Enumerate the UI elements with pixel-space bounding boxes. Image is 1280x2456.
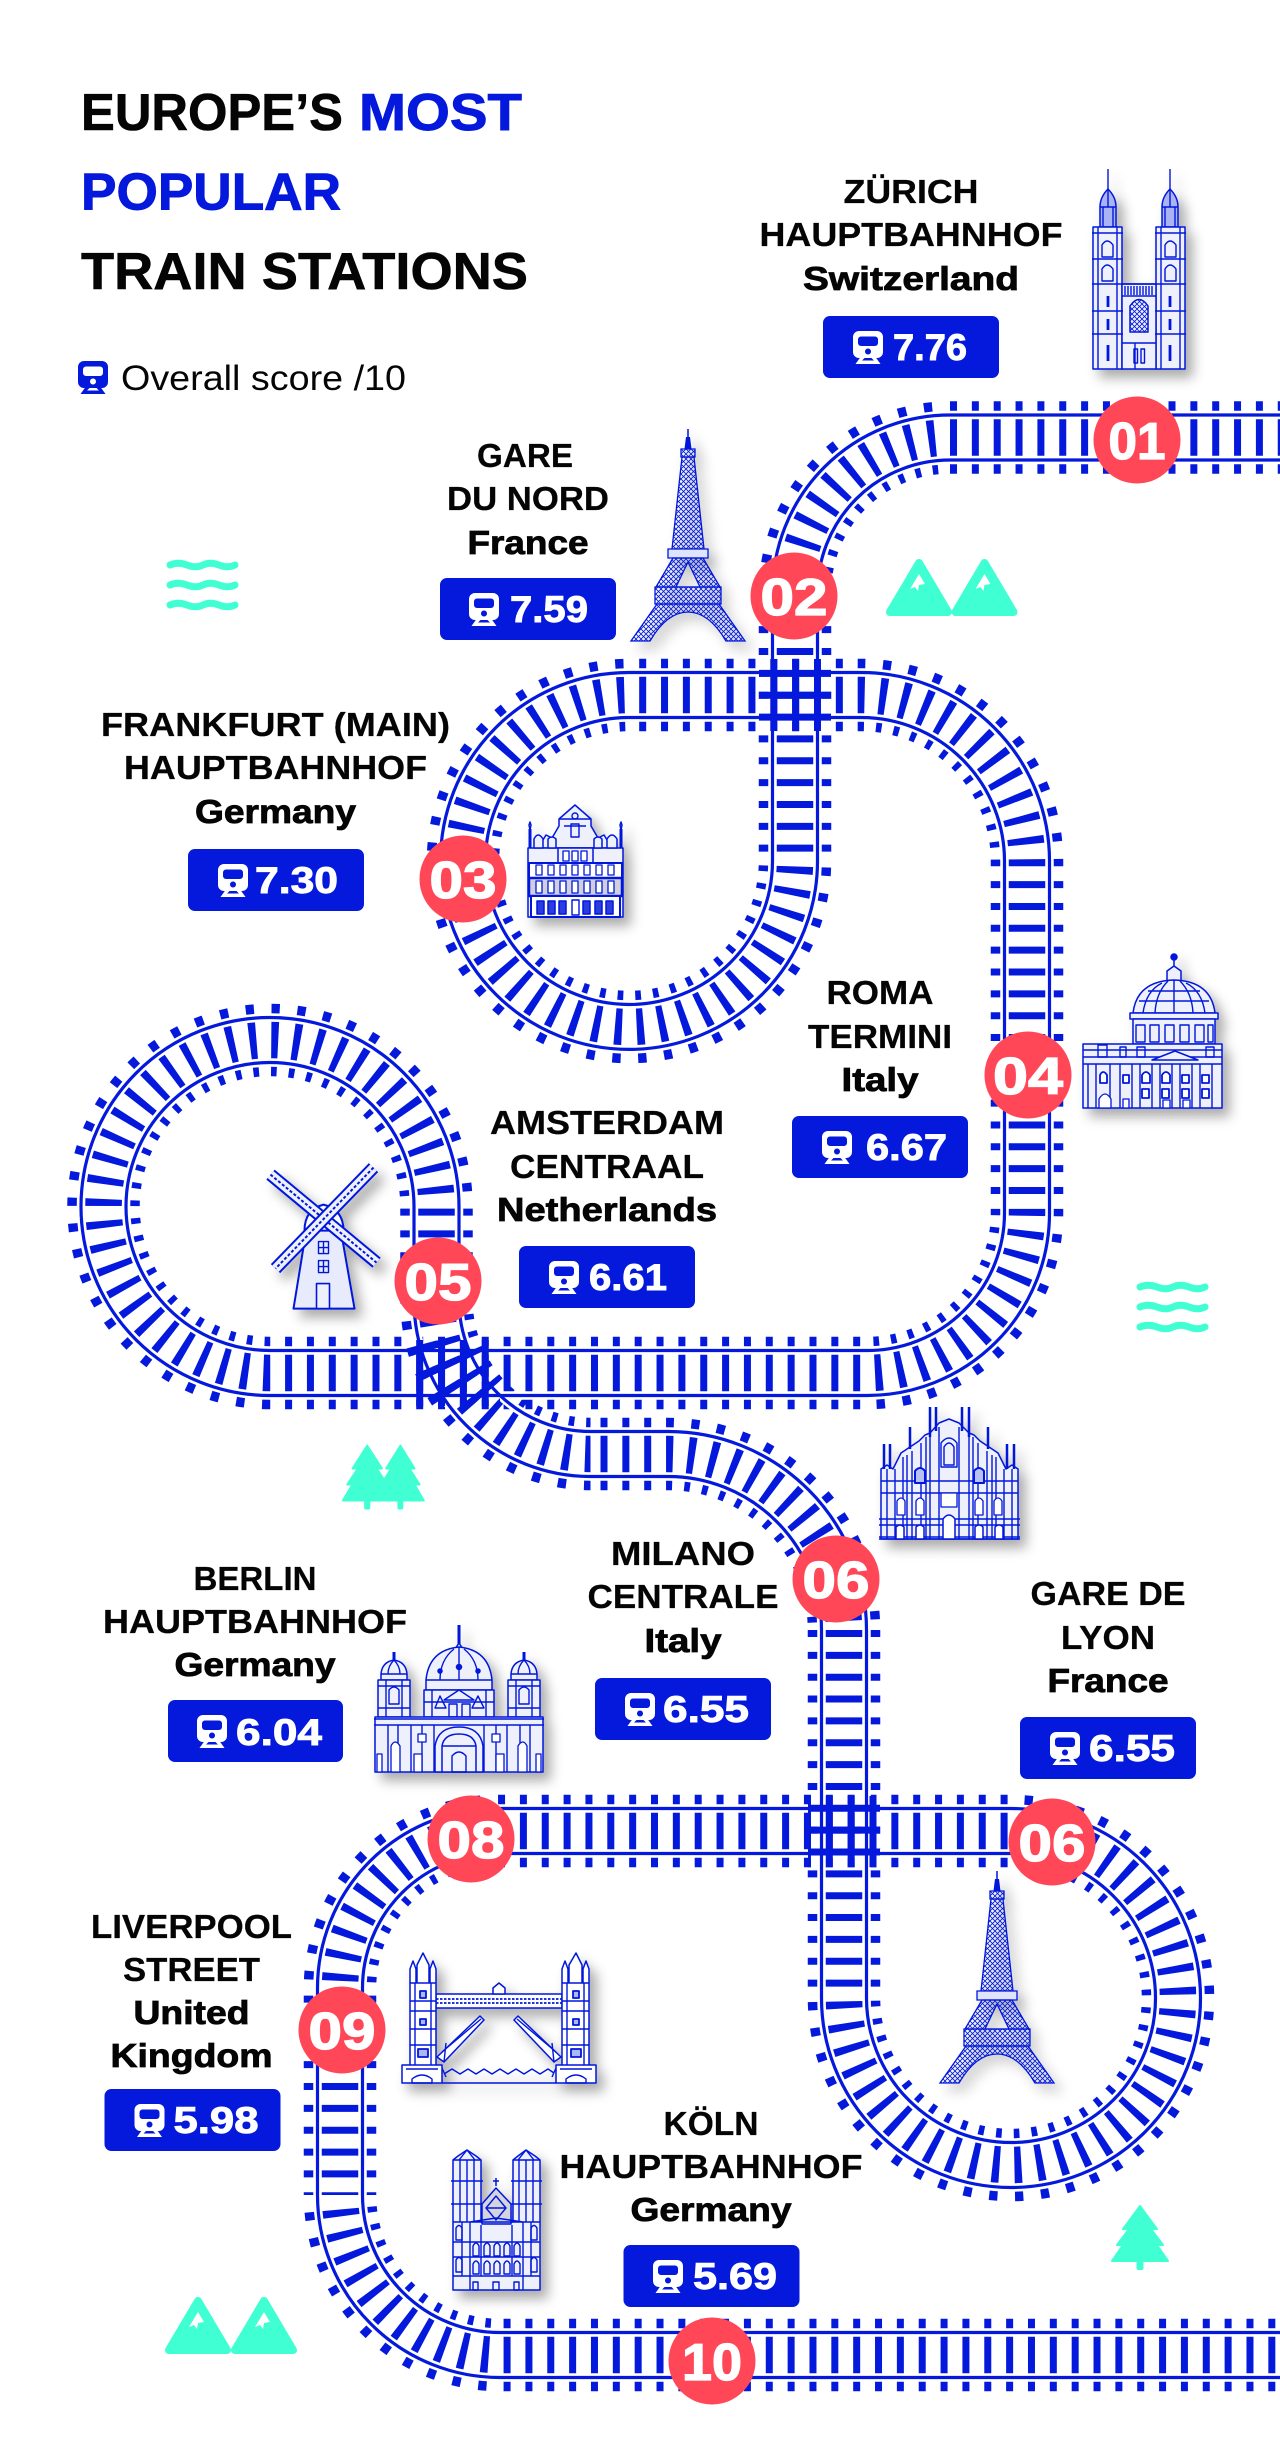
station label: Amsterdam Centraal: AMSTERDAM bbox=[490, 1104, 724, 1141]
landmark: Cologne Cathedral bbox=[451, 2150, 542, 2290]
station label: Gare du Nord: GARE bbox=[477, 437, 573, 474]
rank badge 05 bbox=[394, 1238, 482, 1324]
rank badge 01: 01 bbox=[1108, 413, 1166, 471]
station label: Roma Termini: ROMA bbox=[826, 974, 934, 1011]
station label: Berlin HB: Germany bbox=[174, 1646, 336, 1683]
station label: Gare du Nord: France bbox=[468, 524, 588, 561]
score pill bbox=[624, 2245, 800, 2307]
station label: Köln HB: Germany bbox=[630, 2191, 792, 2228]
title: EUROPE’S bbox=[81, 84, 343, 142]
score pill: 6.55 bbox=[663, 1689, 749, 1730]
landmark: Berlin Cathedral bbox=[374, 1625, 544, 1772]
decoration: mountains bbox=[169, 2301, 293, 2350]
rank badge 08: 08 bbox=[438, 1812, 504, 1870]
station label: Liverpool Street: United bbox=[134, 1994, 250, 2031]
rank badge 06 Milano: 06 bbox=[802, 1552, 870, 1610]
station label: Köln HB: KÖLN bbox=[664, 2105, 758, 2142]
landmark: Römer Frankfurt bbox=[528, 805, 623, 917]
title bbox=[81, 84, 528, 301]
rank badge 04 bbox=[984, 1032, 1072, 1118]
station label: Zürich HB bbox=[760, 173, 1062, 378]
title: TRAIN STATIONS bbox=[81, 243, 528, 301]
station label: Köln HB: HAUPTBAHNHOF bbox=[560, 2148, 862, 2185]
landmark: Eiffel Tower bbox=[631, 429, 745, 641]
station label: Frankfurt bbox=[101, 706, 450, 911]
score pill bbox=[595, 1678, 771, 1740]
station label: Frankfurt: HAUPTBAHNHOF bbox=[124, 749, 427, 786]
rank badge 06 Lyon bbox=[1008, 1798, 1096, 1886]
rank badge 03: 03 bbox=[430, 852, 496, 910]
station label: Liverpool Street bbox=[91, 1908, 292, 2151]
score pill bbox=[188, 849, 364, 911]
station label: Berlin HB bbox=[103, 1560, 407, 1762]
station label: Gare de Lyon: France bbox=[1048, 1662, 1168, 1699]
rank badge 05: 05 bbox=[404, 1254, 472, 1312]
score pill: 5.98 bbox=[174, 2100, 258, 2141]
score pill bbox=[104, 2089, 280, 2151]
station label: Amsterdam Centraal: CENTRAAL bbox=[510, 1148, 704, 1185]
score pill bbox=[792, 1116, 968, 1178]
rank badge 02 bbox=[750, 552, 838, 640]
score pill bbox=[168, 1700, 343, 1762]
rank badge 06 Lyon: 06 bbox=[1018, 1815, 1086, 1873]
decoration: trees bbox=[343, 1446, 424, 1510]
rank badge 06 Milano bbox=[792, 1536, 880, 1622]
station label: Gare de Lyon bbox=[1020, 1575, 1196, 1779]
rank badge 02: 02 bbox=[760, 569, 828, 627]
station label: Gare de Lyon: LYON bbox=[1061, 1619, 1155, 1656]
rank badge 08 bbox=[428, 1796, 514, 1882]
station label: Milano Centrale: MILANO bbox=[611, 1535, 755, 1572]
score pill: 6.04 bbox=[236, 1712, 323, 1753]
score pill bbox=[1020, 1717, 1196, 1779]
rank badge 09: 09 bbox=[308, 2003, 376, 2061]
title: POPULAR bbox=[81, 164, 341, 222]
station label: Köln HB bbox=[560, 2105, 862, 2307]
rank badge 10: 10 bbox=[682, 2334, 742, 2392]
rank badge 01 bbox=[1094, 396, 1180, 484]
station label: Frankfurt: Germany bbox=[195, 793, 357, 830]
landmark: Grossmünster bbox=[1092, 169, 1186, 369]
score pill: 7.30 bbox=[255, 860, 338, 901]
station label: Milano Centrale bbox=[588, 1535, 778, 1740]
score pill: 7.59 bbox=[510, 589, 588, 630]
legend: overall score: Overall score /10 bbox=[121, 359, 406, 398]
landmark: Eiffel Tower bbox=[940, 1871, 1054, 2083]
score pill: 6.61 bbox=[589, 1257, 667, 1298]
station label: Zürich HB: ZÜRICH bbox=[844, 173, 978, 210]
decoration: tree bbox=[1112, 2206, 1168, 2270]
decoration: mountains bbox=[890, 563, 1014, 612]
station label: Amsterdam Centraal: Netherlands bbox=[497, 1191, 717, 1228]
rank badge 04: 04 bbox=[993, 1048, 1063, 1106]
landmark: Tower Bridge bbox=[402, 1953, 596, 2083]
score pill: 7.76 bbox=[893, 327, 967, 368]
title: MOST bbox=[359, 84, 522, 142]
station label: Milano Centrale: Italy bbox=[644, 1622, 722, 1659]
station label: Roma Termini: TERMINI bbox=[808, 1018, 952, 1055]
station label: Amsterdam Centraal bbox=[490, 1104, 724, 1308]
landmark: St Peter's Basilica bbox=[1083, 954, 1222, 1108]
station label: Liverpool Street: Kingdom bbox=[110, 2037, 272, 2074]
rank badge 03 bbox=[420, 836, 506, 922]
landmark: Milan Cathedral bbox=[879, 1407, 1020, 1539]
score pill bbox=[519, 1246, 695, 1308]
station label: Zürich HB: HAUPTBAHNHOF bbox=[760, 216, 1062, 253]
station label: Frankfurt: FRANKFURT (MAIN) bbox=[101, 706, 450, 743]
station label: Zürich HB: Switzerland bbox=[803, 260, 1019, 297]
station label: Gare du Nord bbox=[440, 437, 616, 640]
score pill: 6.67 bbox=[866, 1127, 947, 1168]
score pill bbox=[823, 316, 999, 378]
station label: Gare du Nord: DU NORD bbox=[447, 480, 609, 517]
station label: Liverpool Street: STREET bbox=[123, 1951, 260, 1988]
score pill bbox=[440, 578, 616, 640]
station label: Roma Termini: Italy bbox=[842, 1061, 919, 1098]
station label: Roma Termini bbox=[792, 974, 968, 1178]
landmark: windmill bbox=[270, 1168, 376, 1309]
rank badge 10 bbox=[668, 2318, 756, 2404]
score pill: 5.69 bbox=[693, 2256, 777, 2297]
station label: Milano Centrale: CENTRALE bbox=[588, 1578, 778, 1615]
rank badge 09 bbox=[298, 1986, 386, 2074]
station label: Liverpool Street: LIVERPOOL bbox=[91, 1908, 292, 1945]
score pill: 6.55 bbox=[1089, 1728, 1175, 1769]
decoration: waves bbox=[1140, 1285, 1205, 1329]
station label: Berlin HB: HAUPTBAHNHOF bbox=[103, 1603, 407, 1640]
station label: Gare de Lyon: GARE DE bbox=[1030, 1575, 1186, 1612]
railway track bbox=[81, 415, 1280, 2378]
decoration: waves bbox=[170, 563, 235, 607]
station label: Berlin HB: BERLIN bbox=[194, 1560, 316, 1597]
